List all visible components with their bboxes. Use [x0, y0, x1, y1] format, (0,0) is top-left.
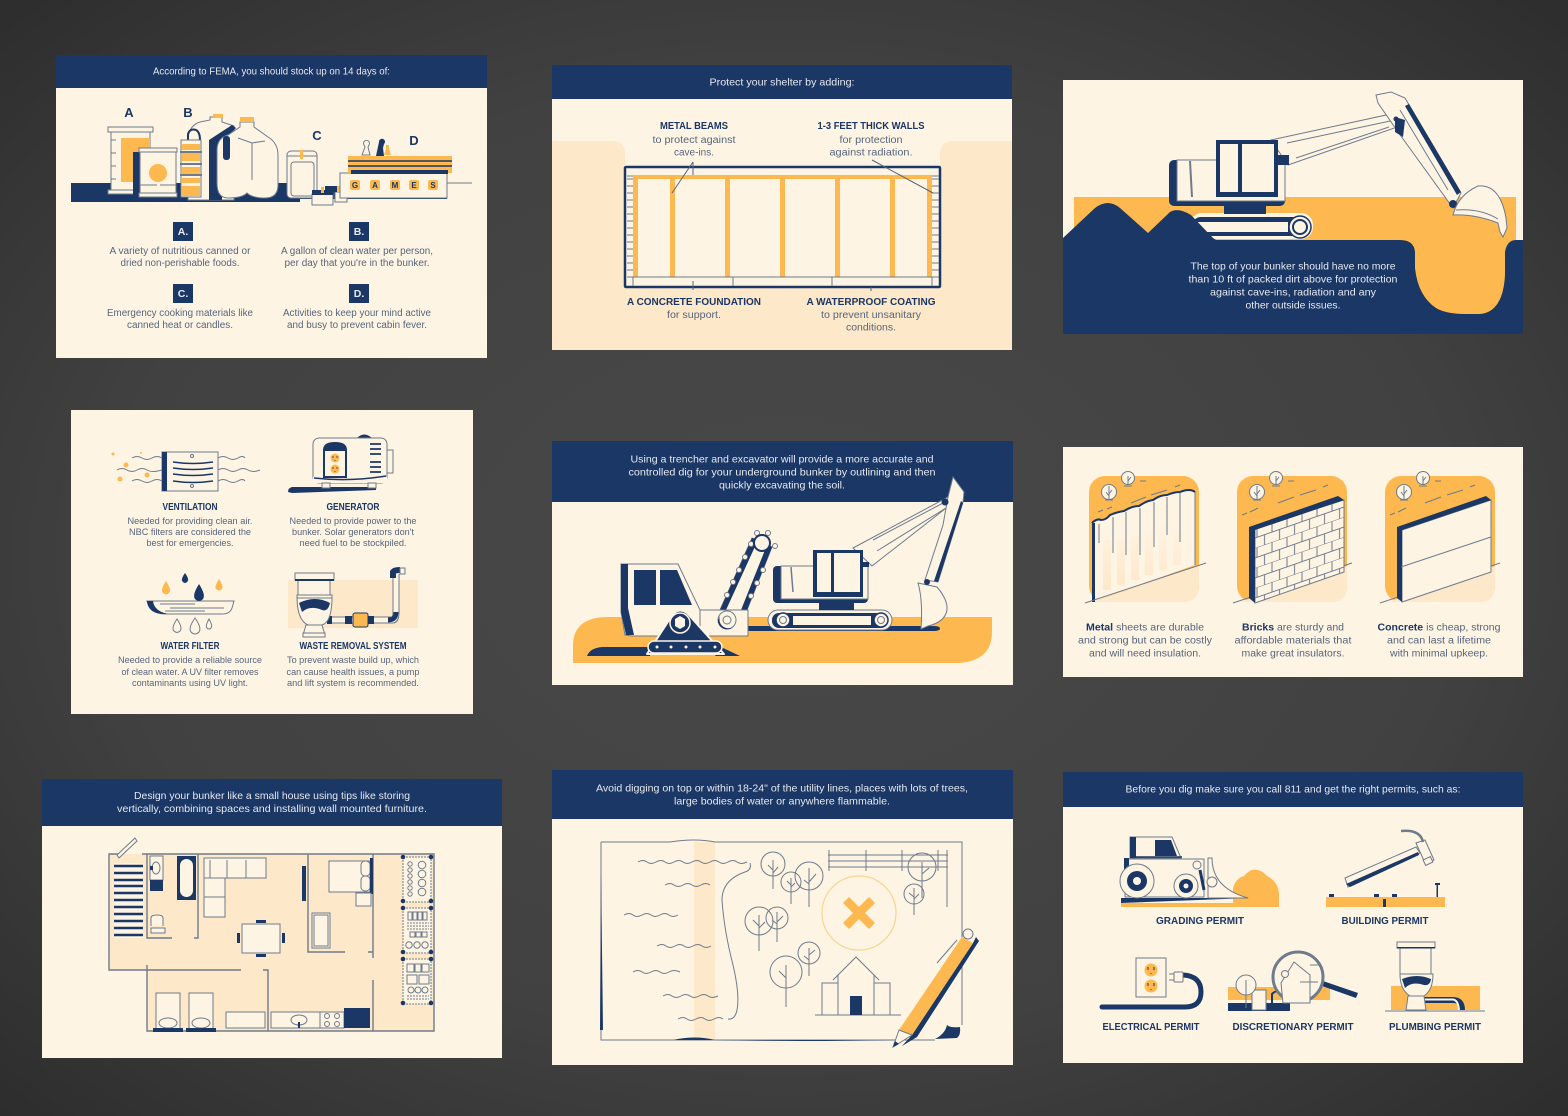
panel: protect your shelter [552, 65, 1012, 350]
item A: A. [178, 226, 188, 238]
label: metal beams [652, 120, 736, 158]
item letters: A [124, 105, 134, 120]
label: waterproof coating: to prevent unsanitary [821, 310, 921, 321]
label: thick walls: 1-3 FEET THICK WALLS [818, 120, 924, 132]
heading and text: generator [290, 501, 416, 548]
item D: and busy to prevent cabin fever. [287, 320, 427, 331]
label: thick walls: for protection [840, 135, 902, 146]
dirt depth text [1188, 260, 1398, 312]
item letters: B [183, 105, 193, 120]
item B: per day that you're in the bunker. [284, 258, 430, 269]
panel: 14 days of supplies [56, 55, 487, 358]
trencher [587, 530, 778, 656]
panel: trencher and excavator [552, 441, 1013, 685]
dirt depth text: against cave-ins, radiation and any [1210, 286, 1377, 298]
item C: canned heat or candles. [127, 320, 233, 331]
label: grading permit: GRADING PERMIT [1156, 915, 1245, 927]
label: waterproof coating: conditions. [846, 322, 896, 334]
heading and text: waste removal: can cause health issues, a pump [286, 667, 420, 677]
text: bricks [1234, 622, 1352, 660]
heading and text: generator: Needed to provide power to the [290, 516, 416, 526]
text: concrete: and can last a lifetime [1387, 636, 1491, 646]
bunker cross-section [625, 160, 940, 291]
item C: Emergency cooking materials like [107, 308, 253, 319]
panel 8 header: Avoid digging on top or within 18-24" of the utility lines, places with lots of trees, [596, 782, 968, 794]
text: metal [1078, 622, 1212, 660]
item D: Activities to keep your mind active [283, 308, 431, 319]
supplies illustration: M [392, 181, 399, 190]
supplies illustration [71, 114, 472, 205]
trees [745, 852, 936, 1007]
item A: dried non-perishable foods. [120, 258, 240, 269]
label: thick walls: against radiation. [830, 148, 912, 158]
icon: bulldozer [1120, 837, 1279, 907]
dig site marker [822, 876, 896, 950]
heading and text: water filter: Needed to provide a reliable source [118, 655, 262, 665]
item A [110, 222, 251, 269]
panel: bunker equipment [71, 410, 473, 714]
panel 9 header: Before you dig make sure you call 811 and get the right permits, such as: [1126, 784, 1460, 796]
item C [107, 284, 253, 331]
panel 7 header [42, 779, 502, 826]
excavator [748, 477, 964, 631]
panel: excavator and dirt depth [1063, 80, 1523, 334]
heading and text: water filter [118, 640, 262, 688]
heading and text: waste removal: To prevent waste build up, which [287, 655, 419, 665]
icon: hammer [1326, 831, 1445, 907]
supplies illustration: A [372, 181, 378, 190]
icon: toilet plumbing [1385, 942, 1485, 1011]
icon: pencil [893, 929, 979, 1047]
label: electrical permit: ELECTRICAL PERMIT [1102, 1021, 1200, 1033]
fence and utility lines [828, 850, 948, 907]
heading and text: waste removal: WASTE REMOVAL SYSTEM [300, 640, 407, 652]
text: bricks: make great insulators. [1242, 648, 1344, 660]
panel 7 header: vertically, combining spaces and installing wall mounted furniture. [117, 803, 427, 815]
yellow ground [573, 617, 992, 663]
heading and text: ventilation [128, 501, 252, 548]
metal wall illustration [1085, 472, 1206, 603]
item letters: C [312, 128, 322, 143]
item D: D. [354, 288, 364, 300]
item A: A variety of nutritious canned or [110, 246, 251, 257]
heading and text: generator: need fuel to be stockpiled. [300, 538, 406, 548]
text: metal: and strong but can be costly [1078, 636, 1212, 646]
label: discretionary permit: DISCRETIONARY PERMIT [1232, 1021, 1354, 1033]
yellow dirt [1074, 197, 1516, 322]
panel 5 header [552, 441, 1013, 502]
label: waterproof coating: A WATERPROOF COATING [806, 296, 936, 308]
panel 2 header [552, 65, 1012, 99]
icon: generator [288, 434, 393, 493]
heading and text: ventilation: VENTILATION [162, 501, 218, 513]
item B [281, 222, 433, 269]
light ground [552, 141, 1012, 350]
item C: C. [178, 288, 188, 300]
heading and text: water filter: WATER FILTER [160, 640, 220, 652]
panel 7 header: Design your bunker like a small house using tips like storing [134, 790, 410, 802]
panel: permits [1063, 772, 1523, 1063]
panel 8 header: large bodies of water or anywhere flammable. [674, 796, 890, 808]
icon: water filter [147, 573, 234, 634]
dirt depth text: The top of your bunker should have no more [1190, 260, 1396, 272]
icon: electrical outlet [1102, 958, 1201, 1007]
panel 5 header: controlled dig for your underground bunker by outlining and then [628, 466, 936, 478]
text: concrete [1378, 622, 1500, 660]
icon: waste removal system [288, 568, 418, 637]
icon: ventilation [112, 452, 260, 491]
label: concrete foundation [627, 296, 761, 321]
panel 2 header: Protect your shelter by adding: [710, 76, 854, 88]
panel 5 header: Using a trencher and excavator will provide a more accurate and [630, 454, 934, 466]
icon: magnifying glass over house [1228, 952, 1358, 1011]
item B: A gallon of clean water per person, [281, 246, 433, 257]
label: building permit: BUILDING PERMIT [1342, 915, 1429, 927]
text: metal: Metal sheets are durable [1086, 622, 1204, 634]
label: concrete foundation: for support. [667, 310, 721, 321]
panel: floor plan [42, 779, 502, 1058]
heading and text: water filter: contaminants using UV light. [132, 678, 248, 688]
concrete wall illustration [1380, 472, 1500, 603]
text: concrete: with minimal upkeep. [1389, 648, 1488, 660]
label: metal beams: to protect against [652, 135, 736, 146]
heading and text: ventilation: best for emergencies. [146, 538, 234, 548]
text: concrete: Concrete is cheap, strong [1378, 622, 1500, 634]
item D [283, 284, 431, 331]
panel 9 header [1063, 772, 1523, 807]
navy ground [1063, 203, 1523, 334]
house [815, 957, 901, 1015]
dirt depth text: than 10 ft of packed dirt above for protection [1188, 274, 1398, 286]
heading and text: water filter: of clean water. A UV filter removes [122, 667, 259, 677]
map [600, 840, 962, 1041]
label: waterproof coating [806, 296, 936, 334]
heading and text: generator: bunker. Solar generators don't [292, 527, 415, 537]
brick wall illustration [1233, 472, 1352, 603]
panel: where not to dig [552, 770, 1013, 1065]
heading and text: waste removal [286, 640, 420, 688]
panel 1 header [56, 55, 487, 88]
excavator [1169, 92, 1507, 239]
heading and text: waste removal: and lift system is recommended. [287, 678, 419, 688]
heading and text: generator: GENERATOR [326, 501, 380, 513]
label: metal beams: cave-ins. [674, 148, 714, 158]
item letters [124, 105, 419, 148]
text: bricks: affordable materials that [1234, 636, 1352, 646]
floor plan drawing [109, 838, 434, 1032]
text: bricks: Bricks are sturdy and [1242, 622, 1344, 634]
label: thick walls [818, 120, 924, 158]
supplies illustration: E [411, 181, 417, 190]
label: concrete foundation: A CONCRETE FOUNDATION [627, 296, 761, 308]
panel: wall materials [1063, 447, 1523, 677]
text: metal: and will need insulation. [1089, 648, 1201, 660]
panel 5 header: quickly excavating the soil. [719, 480, 845, 492]
heading and text: ventilation: NBC filters are considered the [129, 527, 251, 537]
heading and text: ventilation: Needed for providing clean air. [128, 516, 252, 526]
dirt depth text: other outside issues. [1246, 300, 1340, 312]
item letters: D [409, 133, 419, 148]
panel 1 header: According to FEMA, you should stock up on 14 days of: [153, 66, 390, 78]
panel 8 header [552, 770, 1013, 819]
label: plumbing permit: PLUMBING PERMIT [1389, 1021, 1482, 1033]
supplies illustration: G [352, 181, 358, 190]
supplies illustration: S [430, 181, 436, 190]
label: metal beams: METAL BEAMS [660, 120, 728, 132]
item B: B. [354, 226, 364, 238]
